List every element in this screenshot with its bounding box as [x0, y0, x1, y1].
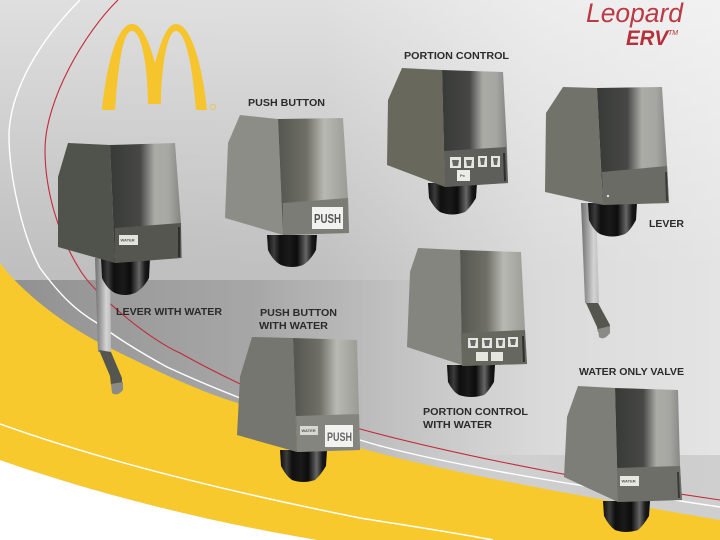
logo: Leopard ERV: [586, 0, 684, 50]
valve: push button: [225, 115, 349, 267]
control panel: [296, 414, 360, 452]
label: portion control: PORTION CONTROL: [404, 50, 510, 62]
water label: WATER: [622, 478, 636, 484]
logo: golden arches: [102, 24, 216, 110]
push label: PUSH: [327, 430, 352, 444]
label: push button with water: [259, 307, 337, 332]
head: [101, 258, 150, 295]
control panel: [115, 223, 181, 263]
valve: push button with water: [237, 337, 360, 482]
housing front: [460, 250, 527, 366]
housing front: [293, 338, 360, 452]
control panel: [602, 166, 669, 205]
valve: portion control with water: [407, 248, 527, 397]
push label: PUSH: [314, 211, 341, 226]
water label: [300, 426, 318, 435]
housing side: [564, 386, 618, 502]
valve: water only: [564, 386, 682, 532]
label: lever: LEVER: [649, 218, 684, 230]
valve: lever with water: [58, 143, 182, 394]
label: push button with water: PUSH BUTTON: [260, 307, 337, 319]
housing front: [278, 118, 349, 235]
logo: Leopard ERV: ERV: [626, 27, 670, 50]
buttons: [450, 156, 500, 181]
head: [267, 235, 317, 267]
white curve lower: [0, 424, 493, 540]
control panel: [283, 198, 349, 235]
buttons: Px: [460, 173, 466, 178]
label: portion control with water: WITH WATER: [423, 419, 492, 431]
lever: [581, 203, 610, 338]
housing front: [110, 143, 182, 263]
control panel: [444, 147, 508, 187]
label: push button with water: WITH WATER: [259, 320, 328, 332]
label: portion control with water: [423, 406, 529, 431]
housing side: [387, 68, 445, 187]
housing front: [442, 70, 508, 187]
housing front: [615, 388, 682, 502]
logo: Leopard ERV: TM: [668, 30, 678, 37]
housing side: [237, 337, 297, 452]
water label: [119, 235, 138, 245]
valve: lever: [545, 87, 669, 338]
head: [428, 183, 477, 214]
housing side: [225, 115, 283, 235]
push label: [312, 207, 343, 229]
buttons: [468, 337, 518, 361]
housing side: [58, 143, 115, 263]
water label: WATER: [302, 428, 316, 433]
housing side: [407, 248, 462, 365]
label: push button: PUSH BUTTON: [248, 97, 325, 109]
water label: [620, 476, 639, 486]
white bottom area: [0, 460, 317, 540]
yellow swoosh band: [0, 263, 720, 540]
head: [588, 203, 637, 236]
label: portion control with water: PORTION CONTROL: [423, 406, 529, 418]
valve: portion control: [387, 68, 508, 214]
control panel: [461, 330, 527, 366]
label: lever with water: LEVER WITH WATER: [116, 306, 222, 318]
water label: WATER: [120, 238, 135, 242]
head: [603, 501, 650, 532]
housing front: [597, 87, 669, 205]
head: [280, 450, 327, 482]
head: [447, 365, 495, 397]
push label: [325, 425, 353, 447]
control panel: [617, 466, 682, 502]
label: water only valve: WATER ONLY VALVE: [579, 366, 684, 378]
housing side: [545, 87, 603, 205]
lever: [95, 258, 123, 394]
